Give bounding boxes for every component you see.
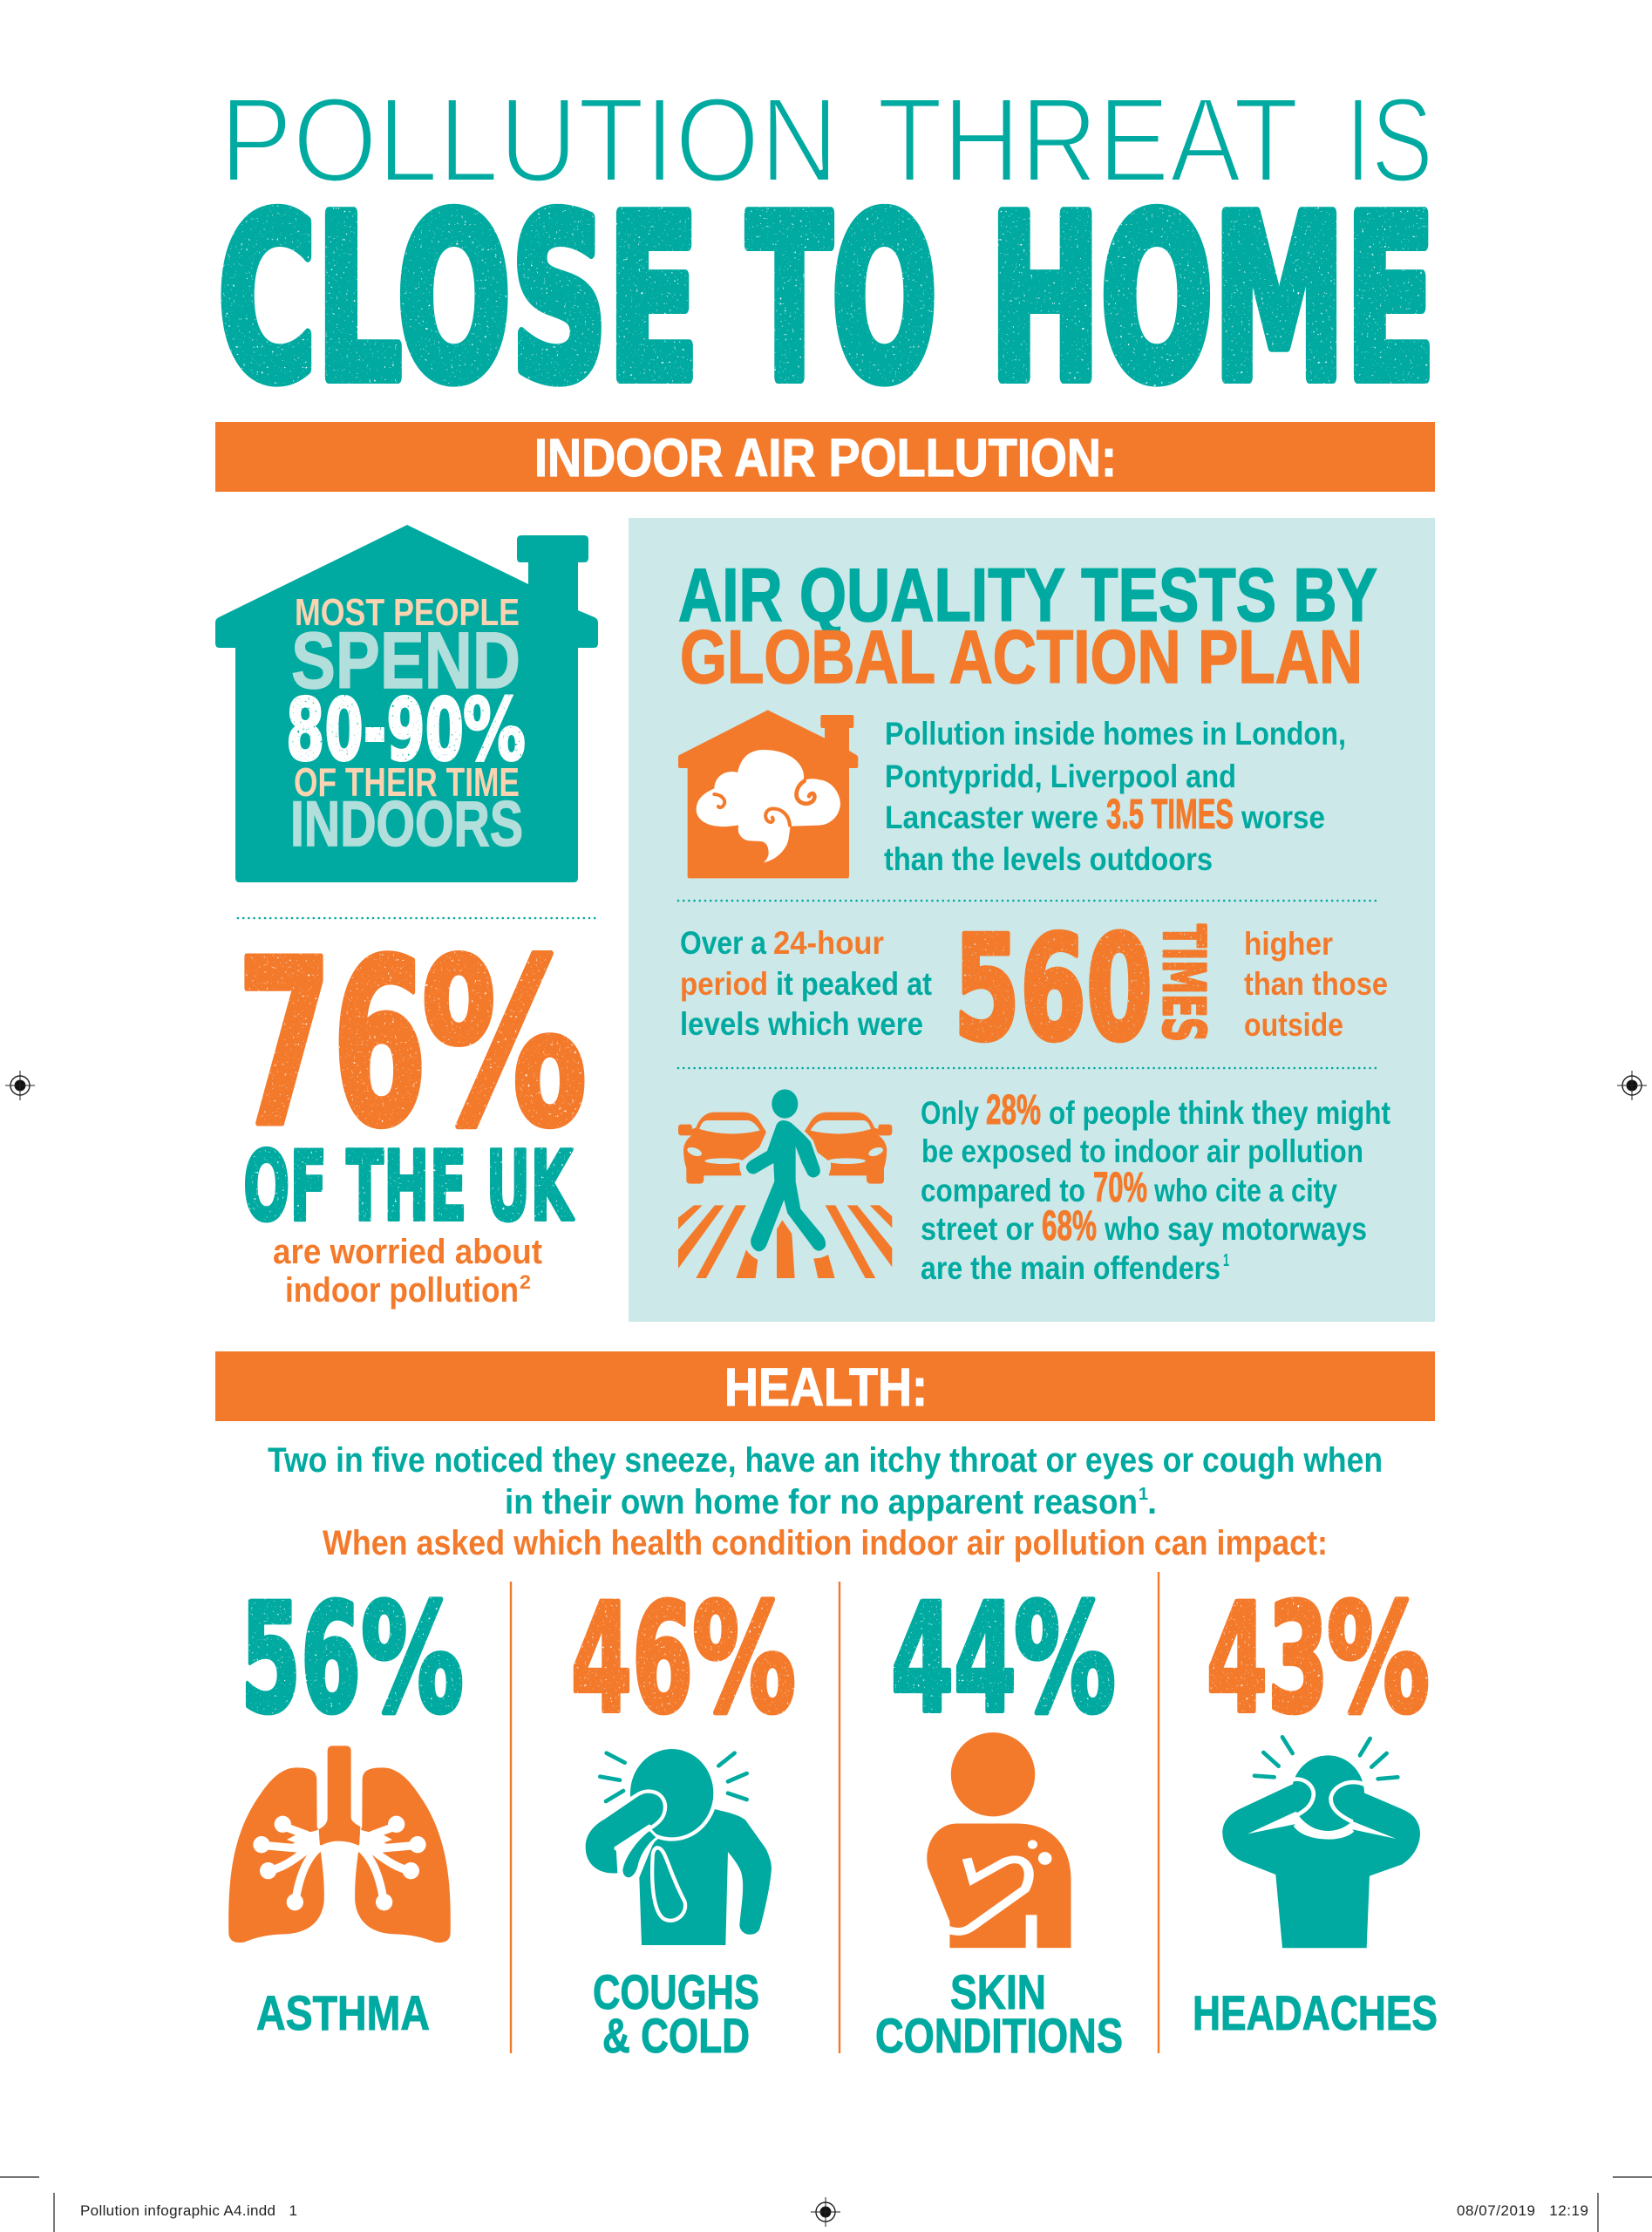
house text: % [463,681,526,780]
panel: air quality tests [629,518,1435,1322]
text: 28% 70% 68% [921,1087,1390,1286]
print slug: date: 08/07/2019 12:19 [1457,2202,1588,2219]
health intro text: in their own home for no apparent reason [505,1483,1138,1521]
caption: indoor pollution [285,1271,519,1310]
title line: pollution threat is: POLLUTION [220,73,839,208]
stat: 44%: 44 [891,1571,1016,1746]
banner: health: HEALTH: [724,1358,928,1417]
icon: person coughing [586,1749,772,1945]
text: 28% 70% 68%: Only [921,1095,979,1131]
column: headaches [1193,1571,1438,2040]
caption [273,1233,542,1310]
stat: 46%: % [692,1571,796,1746]
text: higher than those outside [1244,926,1388,1043]
health intro text: Two in five noticed they sneeze, have an itchy throat or eyes or cough when [268,1441,1383,1480]
text: 28% 70% 68%: who cite a city [1153,1173,1337,1208]
panel heading: AIR QUALITY TESTS BY [678,554,1377,637]
icon: person scratching shoulder [927,1732,1071,1949]
stat: 56%: 56 [241,1571,361,1746]
text: 28% 70% 68%: be exposed to indoor air pollution [921,1133,1363,1169]
title line: close to home [218,169,1436,432]
caption: are worried about [273,1233,542,1271]
text: 24-hour peak left: 24-hour [773,925,884,961]
text: 24-hour peak left: it peaked at [776,966,932,1002]
text: higher than those outside: than those [1244,966,1388,1002]
banner: indoor air pollution: INDOOR AIR POLLUTION: [534,428,1117,487]
label: headaches: HEADACHES [1193,1985,1438,2040]
text: 24-hour peak left [680,925,932,1042]
big number 76%: 76 [237,911,427,1177]
text: 28% 70% 68%: 70% [1093,1165,1147,1211]
text: higher than those outside: higher [1244,926,1333,962]
text: 28% 70% 68%: compared to [921,1173,1085,1208]
house text [286,591,526,860]
text: 28% 70% 68%: 68% [1042,1203,1097,1249]
title line: pollution threat is: IS [1345,73,1433,208]
house text: MOST PEOPLE [295,591,520,634]
print slug: file name: Pollution infographic A4.indd 1 [80,2202,297,2219]
of the UK: OF THE UK [243,1131,574,1243]
text: 28% 70% 68%: street or [921,1211,1034,1247]
label: asthma: ASTHMA [256,1985,430,2040]
text: 28% 70% 68%: of people think they might [1049,1095,1390,1131]
stat: 43%: 43 [1207,1571,1329,1746]
text: 28% 70% 68%: are the main offenders [921,1250,1220,1286]
text: 28% 70% 68%: 28% [986,1087,1041,1133]
text: 3.5 times worse: Pollution inside homes in London, [885,716,1346,752]
stat: 43%: % [1327,1571,1430,1746]
house text: 80-90 [286,681,464,780]
stat: 44%: % [1014,1571,1116,1746]
text: 24-hour peak left: Over a [680,925,766,961]
health intro text: . [1147,1483,1157,1521]
icon: lungs [228,1745,451,1943]
label: skin conditions: CONDITIONS [875,2008,1123,2063]
health intro text: When asked which health condition indoor air pollution can impact: [323,1524,1328,1562]
column: asthma [228,1571,464,2040]
panel heading: GLOBAL ACTION PLAN [680,616,1363,699]
title [218,73,1436,432]
house text: INDOORS [290,789,523,860]
text: 3.5 times worse: than the levels outdoors [884,841,1213,877]
text: 3.5 times worse: 3.5 TIMES [1106,792,1234,838]
column: coughs and cold [571,1571,796,2063]
title line: close to home: TO [747,169,937,432]
registration mark: left [5,1071,35,1100]
banner: indoor air pollution [215,422,1435,492]
banner: health [215,1351,1435,1421]
icon: teal house [215,525,598,882]
text: 28% 70% 68%: who say motorways [1104,1211,1367,1247]
caption: 2 [520,1271,531,1293]
column: skin conditions [875,1571,1123,2063]
text: 24-hour peak left: levels which were [680,1006,923,1042]
title line: close to home: CLOSE [218,169,699,432]
big number 76%: % [421,911,588,1177]
label: coughs and cold: COUGHS [593,1964,759,2019]
panel: house with 80-90% indoors [215,525,598,882]
icon: house with smoke cloud [678,710,858,878]
text: 3.5 times worse: worse [1241,800,1325,835]
panel heading [678,554,1377,699]
label: skin conditions [875,1964,1123,2063]
text: 3.5 times worse [884,716,1346,877]
house text: OF THEIR TIME [294,759,520,805]
stat: 560 times: TIMES [1150,924,1217,1042]
label: coughs and cold: & COLD [602,2008,750,2063]
text: 24-hour peak left: period [680,966,768,1002]
registration mark: right [1617,1071,1647,1100]
stat: 560 times: 560 [954,905,1152,1072]
icon: pedestrian between cars [678,1089,892,1278]
house text: SPEND [291,616,520,705]
text: 3.5 times worse: Pontypridd, Liverpool and [885,759,1236,794]
label: skin conditions: SKIN [950,1964,1046,2019]
icon: person holding head [1222,1737,1420,1948]
stat: 76% of the UK [237,911,588,1310]
title line: pollution threat is: THREAT [877,73,1299,208]
registration mark: bottom [811,2197,840,2227]
stat: 46%: 46 [571,1571,693,1746]
text: higher than those outside: outside [1244,1007,1343,1043]
stat: 56%: % [361,1571,464,1746]
text: 3.5 times worse: Lancaster were [885,800,1098,835]
label: coughs and cold [593,1964,759,2063]
text: 28% 70% 68%: 1 [1223,1251,1229,1270]
title line: pollution threat is [220,73,1433,208]
health intro text [268,1441,1383,1562]
print crop marks [0,2177,1652,2232]
health intro text: 1 [1139,1485,1148,1504]
